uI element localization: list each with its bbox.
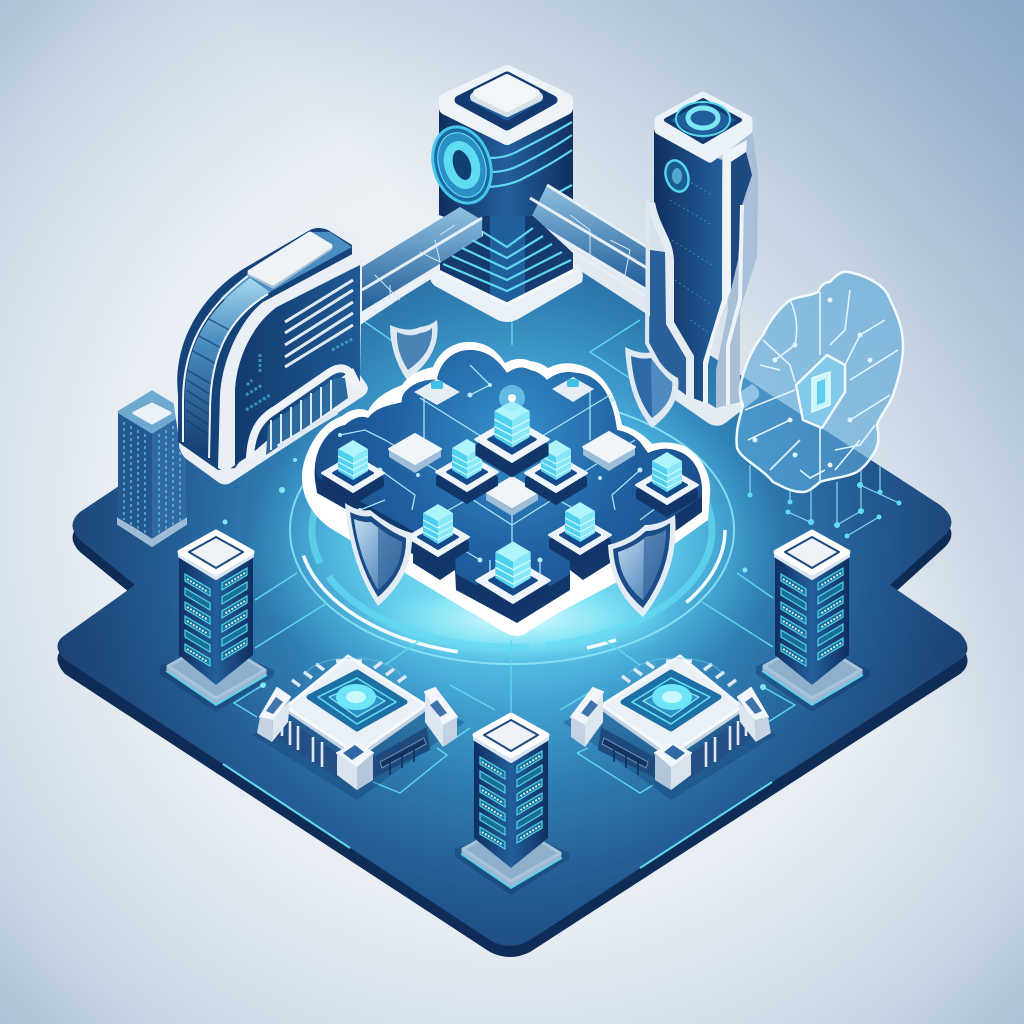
holographic rings xyxy=(290,396,734,664)
cloud circuits xyxy=(340,365,680,590)
white box center xyxy=(486,477,538,516)
white box left xyxy=(389,434,441,473)
building under layer xyxy=(177,228,352,470)
stack node lower right xyxy=(549,502,611,566)
tower base xyxy=(667,378,759,426)
cloud glow xyxy=(245,380,785,710)
building silhouette xyxy=(169,221,368,484)
platform circuit lines xyxy=(234,320,795,793)
platform base xyxy=(58,225,968,957)
brain central chip xyxy=(796,355,845,428)
upper right shield xyxy=(625,347,678,428)
brain hologram xyxy=(737,272,903,538)
platform circuit nodes xyxy=(222,458,766,690)
right glass bridge xyxy=(530,185,647,297)
cloud outline xyxy=(302,342,710,636)
bright glow under cloud xyxy=(352,570,682,666)
arch windows xyxy=(266,378,348,455)
left glass bridge xyxy=(362,207,482,320)
server rack right xyxy=(756,532,870,712)
white box right xyxy=(583,432,635,471)
processor chip left xyxy=(252,656,465,800)
large left shield xyxy=(345,503,412,606)
center tower lower stack xyxy=(430,216,583,322)
large right shield xyxy=(608,515,676,617)
grille panel xyxy=(185,278,270,458)
tower top plate xyxy=(659,96,748,158)
top center sparkle xyxy=(499,385,525,411)
cloud top surface xyxy=(315,350,702,586)
small left tower xyxy=(118,392,186,546)
stack node top center xyxy=(475,400,549,476)
brain outline xyxy=(737,272,903,492)
white curved strip xyxy=(218,250,360,472)
tower main face xyxy=(654,130,722,402)
left wing xyxy=(650,250,686,395)
roof pad xyxy=(250,236,330,286)
stack node lower left xyxy=(407,504,469,568)
stack node inner right xyxy=(525,440,587,504)
central cloud xyxy=(302,324,710,636)
roof band xyxy=(220,232,352,305)
stack node inner left xyxy=(436,439,498,503)
stack node left xyxy=(322,440,384,504)
stack node right xyxy=(636,452,698,516)
far small node right xyxy=(552,377,594,402)
right white strip xyxy=(703,140,747,403)
server rack bottom xyxy=(455,715,569,895)
tower back panel xyxy=(716,130,758,408)
far small node left xyxy=(414,379,460,405)
stack node bottom center xyxy=(476,541,550,617)
center tower upper body xyxy=(439,72,573,240)
cloud extruded base xyxy=(315,350,702,623)
center tower ring emblem xyxy=(423,119,501,211)
brain connector lines xyxy=(750,465,899,536)
left curved building xyxy=(169,221,368,484)
building right face xyxy=(235,265,360,465)
processor chip right xyxy=(563,656,776,800)
right tall tower xyxy=(647,96,759,426)
server rack left xyxy=(160,532,274,712)
upper left small shield xyxy=(390,320,438,380)
cloud circuit nodes xyxy=(338,383,662,562)
